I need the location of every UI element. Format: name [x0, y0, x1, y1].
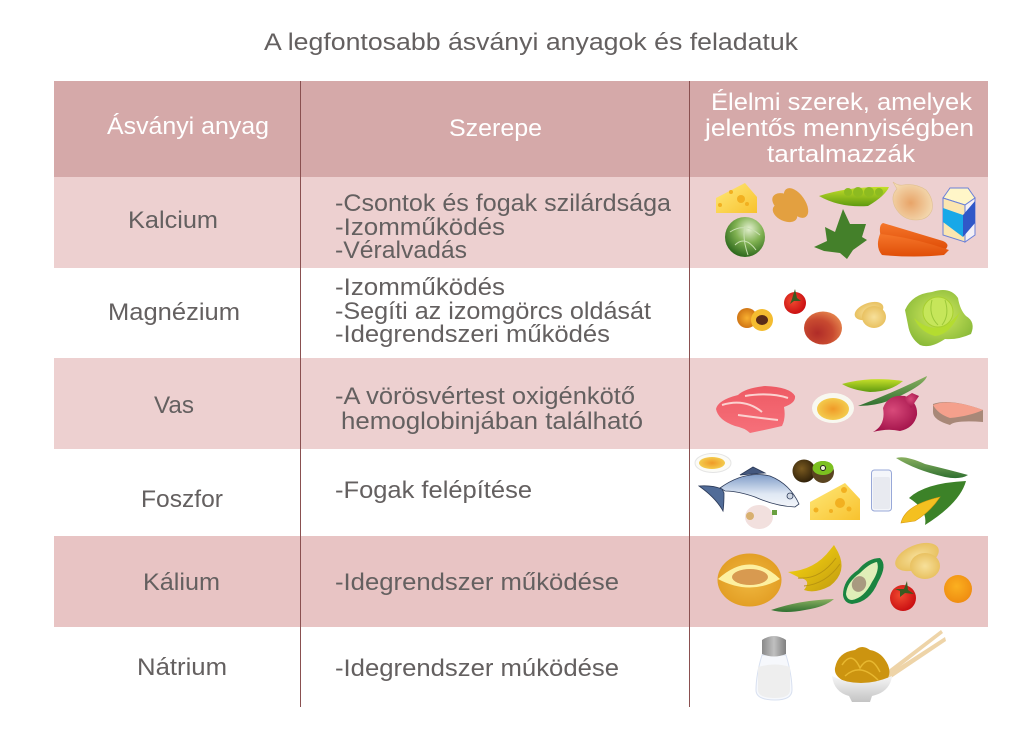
mineral: Magnézium: Magnézium — [108, 299, 240, 326]
roles: Vas: hemoglobinjában található — [341, 408, 643, 435]
icon: salmon steak — [933, 402, 983, 425]
roles: Magnézium: -Segíti az izomgörcs oldását — [335, 298, 651, 325]
mineral: Vas: Vas — [154, 392, 194, 419]
icon: potato — [891, 537, 943, 579]
roles: Magnézium: -Izomműködés — [335, 274, 505, 301]
header: foods column: jelentős mennyiségben — [704, 115, 974, 142]
icon: corn — [901, 481, 966, 525]
roles: Kalcium: -Izomműködés — [335, 214, 505, 241]
header: Ásványi anyag: Ásványi anyag — [107, 113, 269, 140]
icon: egg half — [695, 454, 731, 472]
foods: Vas — [716, 376, 983, 433]
icon: green bean — [858, 376, 927, 406]
icon: cheese — [810, 483, 860, 520]
icon: cucumber — [771, 599, 834, 612]
icon: potato — [852, 298, 886, 328]
roles: Magnézium — [335, 274, 651, 348]
icon: meat — [716, 386, 795, 433]
icon: melon — [718, 554, 782, 606]
roles: Kálium: -Idegrendszer működése — [335, 569, 619, 596]
foods: Nátrium — [756, 630, 946, 702]
icon: orange — [944, 575, 972, 603]
roles: Kalcium — [335, 190, 672, 264]
icon: tomato — [890, 581, 916, 611]
icon: salt shaker — [756, 636, 792, 700]
icon: lettuce — [905, 290, 973, 346]
foods: Kálium — [718, 537, 972, 612]
header: foods column: Élelmi szerek, amelyek — [711, 89, 973, 116]
header: foods column: tartalmazzák — [767, 141, 916, 168]
foods: Foszfor — [695, 454, 968, 529]
icon: apricot — [737, 308, 773, 331]
icon: banana — [788, 545, 842, 591]
mineral: Kálium: Kálium — [143, 569, 220, 596]
icon: peanut ginger — [769, 184, 813, 226]
row band: Vas — [54, 358, 988, 449]
icon: onion — [893, 182, 932, 220]
icon: milk carton — [943, 188, 975, 242]
mineral: Foszfor: Foszfor — [141, 486, 223, 513]
title: A legfontosabb ásványi anyagok és feladatuk — [264, 29, 799, 56]
icon: green bean — [896, 457, 968, 478]
header band — [54, 81, 988, 177]
icon: garlic — [745, 505, 777, 529]
roles: Magnézium: -Idegrendszeri működés — [335, 321, 610, 348]
row band: Kalcium — [54, 177, 988, 268]
mineral: Kalcium: Kalcium — [128, 207, 218, 234]
icon: fish — [699, 467, 799, 511]
icon: cheese — [716, 183, 757, 213]
header: Szerepe: Szerepe — [449, 115, 542, 142]
icon: glass of milk — [872, 470, 892, 511]
icon: leaf — [814, 209, 867, 259]
icon: pea pod — [842, 379, 903, 392]
icon: tomato — [784, 289, 806, 314]
foods: Kalcium — [716, 182, 975, 346]
icon: brussels sprout — [725, 217, 765, 257]
icon: kiwi — [792, 460, 834, 483]
roles: Nátrium: -Idegrendszer múködése — [335, 655, 619, 682]
roles: Vas — [335, 383, 643, 435]
roles: Vas: -A vörösvértest oxigénkötő — [335, 383, 635, 410]
icon: avocado — [843, 558, 884, 604]
roles: Foszfor: -Fogak felépítése — [335, 477, 532, 504]
icon: noodles bowl — [832, 630, 946, 702]
row band: Kálium — [54, 536, 988, 627]
icon: pea pod — [819, 187, 889, 206]
icon: beet — [873, 393, 919, 432]
roles: Kalcium: -Csontok és fogak szilárdsága — [335, 190, 672, 217]
header: foods column — [704, 89, 974, 168]
icon: peach — [804, 312, 842, 344]
icon: egg half — [812, 393, 854, 423]
roles: Kalcium: -Véralvadás — [335, 237, 467, 264]
icon: carrots — [878, 223, 949, 256]
mineral: Nátrium: Nátrium — [137, 654, 227, 681]
